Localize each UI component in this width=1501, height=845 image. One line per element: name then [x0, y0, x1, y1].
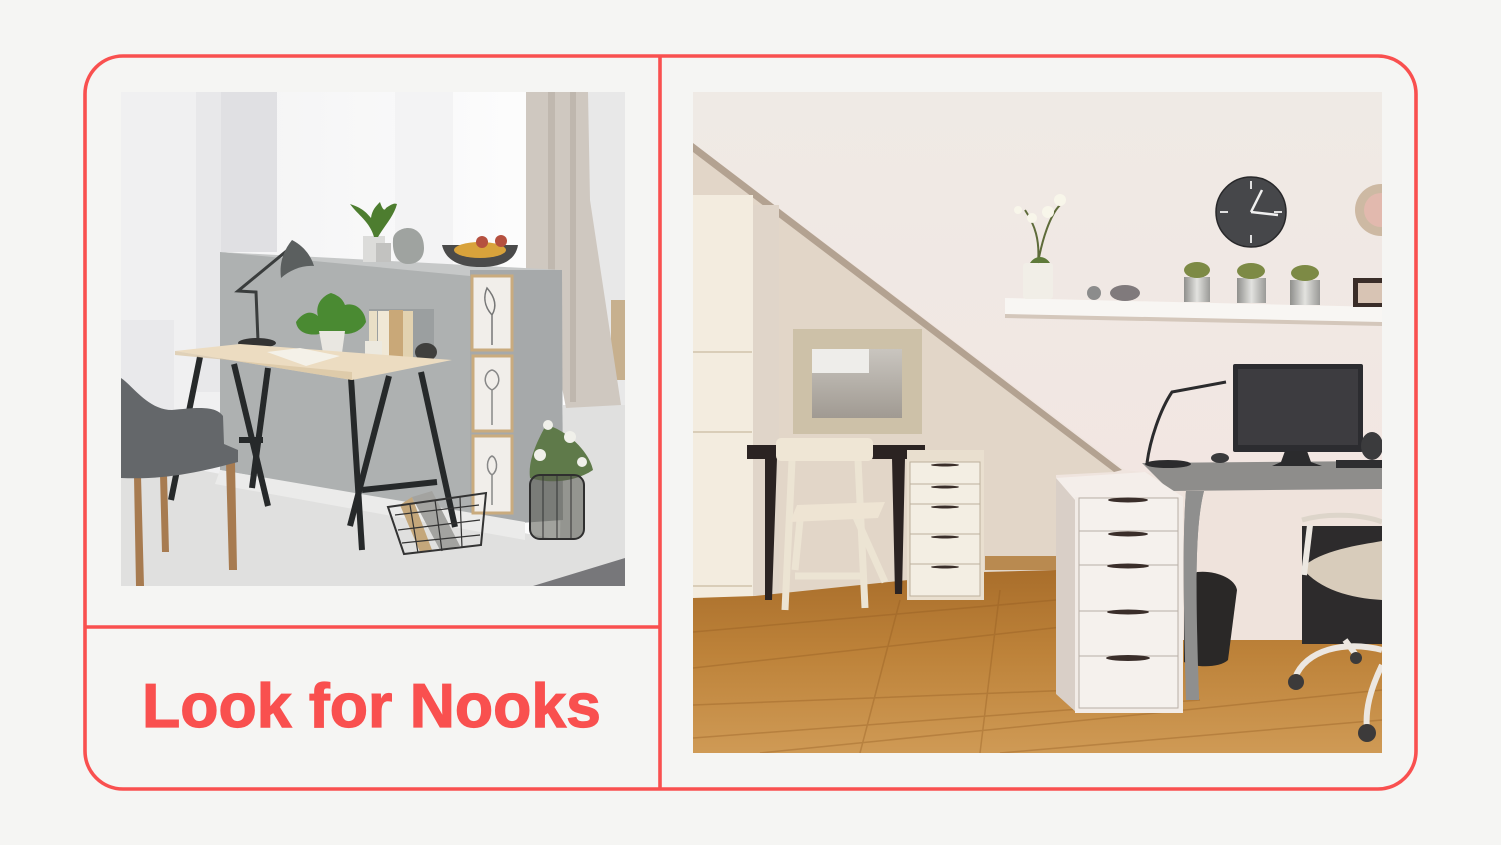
- shelf decor stones: [1087, 285, 1140, 301]
- floor: [693, 556, 1382, 753]
- round wall plate: [1355, 184, 1382, 236]
- floor: [121, 405, 625, 586]
- desk top: [175, 344, 452, 380]
- desk lamp: [238, 240, 314, 348]
- sloped ceiling wall: [693, 92, 1382, 500]
- white chair: [776, 438, 885, 610]
- computer tower: [1302, 526, 1382, 644]
- orchid vase: [1014, 194, 1066, 299]
- chair: [121, 378, 238, 586]
- picture frame: [1353, 278, 1382, 307]
- desk lamp: [1145, 382, 1226, 468]
- framed botanical prints: [472, 276, 512, 513]
- rug: [533, 558, 625, 586]
- partition wall: [220, 252, 470, 515]
- mirror: [793, 329, 922, 434]
- office chair: [1288, 515, 1382, 742]
- bin: [1184, 572, 1237, 666]
- work desk: [1142, 461, 1382, 700]
- side table behind curtain: [611, 300, 625, 380]
- wall below work desk: [1183, 490, 1382, 640]
- monitor: [1211, 364, 1383, 468]
- tall drawer unit: [1056, 472, 1183, 713]
- title: Look for Nooks: [142, 672, 601, 741]
- leg front over bin: [1184, 491, 1204, 700]
- small drawer unit: [907, 450, 984, 600]
- potted succulents: [1184, 262, 1320, 305]
- vanity table: [747, 445, 925, 600]
- curtain: [526, 92, 621, 408]
- infographic canvas: [83, 54, 1418, 791]
- wall clock: [1216, 177, 1286, 247]
- alcove wall: [693, 148, 1114, 620]
- floor plant in wire stand: [530, 420, 593, 539]
- books on shelf block: [365, 309, 437, 359]
- fruit basket and vases: [350, 202, 518, 267]
- frame: rounded red outline with dividers: [85, 56, 1416, 789]
- wire basket with books: [388, 491, 486, 554]
- wall shelf: [1005, 298, 1382, 326]
- desk legs: [171, 357, 455, 550]
- potted plant: [296, 293, 366, 353]
- panel: left photo of desk by partition wall: [121, 92, 625, 586]
- wardrobe: [693, 195, 779, 598]
- panel: right photo of attic workspace: [693, 92, 1407, 753]
